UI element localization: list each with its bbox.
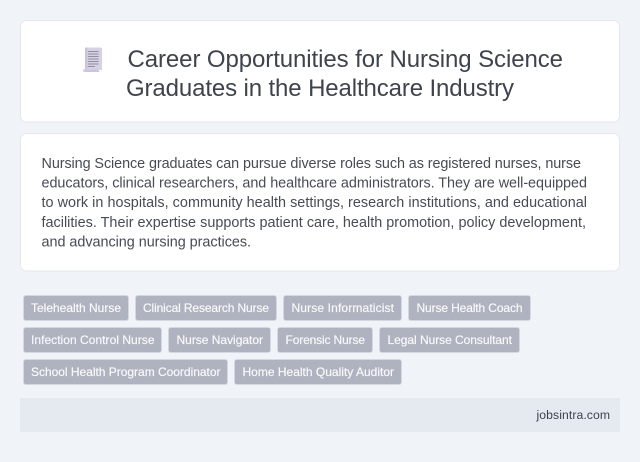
text block: description: Nursing Science graduates can pursue diverse roles such as registered nurses, nurse bbox=[42, 156, 581, 172]
title: Career Opportunities for Nursing Science bbox=[128, 46, 563, 73]
tag: School Health Program Coordinator bbox=[24, 360, 228, 384]
tag list: career roles bbox=[24, 296, 530, 384]
tag: Clinical Research Nurse: Clinical Research Nurse bbox=[143, 301, 269, 315]
title bbox=[126, 46, 563, 102]
text block: description bbox=[42, 156, 587, 250]
panel: description bbox=[20, 134, 620, 271]
tag: Nurse Health Coach bbox=[408, 296, 530, 320]
tag: Legal Nurse Consultant: Legal Nurse Consultant bbox=[388, 333, 513, 347]
panel: title header bbox=[20, 20, 620, 122]
tag: School Health Program Coordinator: School Health Program Coordinator bbox=[31, 365, 220, 379]
footer source text: jobsintra.com bbox=[536, 408, 610, 422]
text block: description: educators, clinical researchers, and healthcare administrators. They are well-equipped bbox=[42, 176, 587, 192]
tag: Infection Control Nurse: Infection Control Nurse bbox=[31, 333, 155, 347]
tag: Home Health Quality Auditor: Home Health Quality Auditor bbox=[242, 365, 394, 379]
text block: description: and advancing nursing practices. bbox=[42, 234, 251, 250]
tag: Legal Nurse Consultant bbox=[380, 328, 520, 352]
footer bbox=[20, 398, 620, 432]
tag: Nurse Informaticist bbox=[284, 296, 402, 320]
tag: Clinical Research Nurse bbox=[136, 296, 276, 320]
title: Graduates in the Healthcare Industry bbox=[126, 75, 514, 102]
tag: Forensic Nurse: Forensic Nurse bbox=[286, 333, 365, 347]
tag: Forensic Nurse bbox=[278, 328, 372, 352]
icon: document scroll bbox=[83, 48, 102, 72]
text block: description: facilities. Their expertise supports patient care, health promotion, policy development, bbox=[42, 215, 586, 231]
text block: description: to work in hospitals, community health settings, research institutions, and educational bbox=[42, 195, 587, 211]
tag: Nurse Health Coach: Nurse Health Coach bbox=[416, 301, 522, 315]
tag: Nurse Informaticist: Nurse Informaticist bbox=[292, 301, 395, 315]
tag: Nurse Navigator: Nurse Navigator bbox=[176, 333, 263, 347]
tag: Nurse Navigator bbox=[168, 328, 270, 352]
tag: Home Health Quality Auditor bbox=[234, 360, 402, 384]
tag: Telehealth Nurse: Telehealth Nurse bbox=[31, 301, 121, 315]
tag: Telehealth Nurse bbox=[24, 296, 128, 320]
tag: Infection Control Nurse bbox=[24, 328, 162, 352]
